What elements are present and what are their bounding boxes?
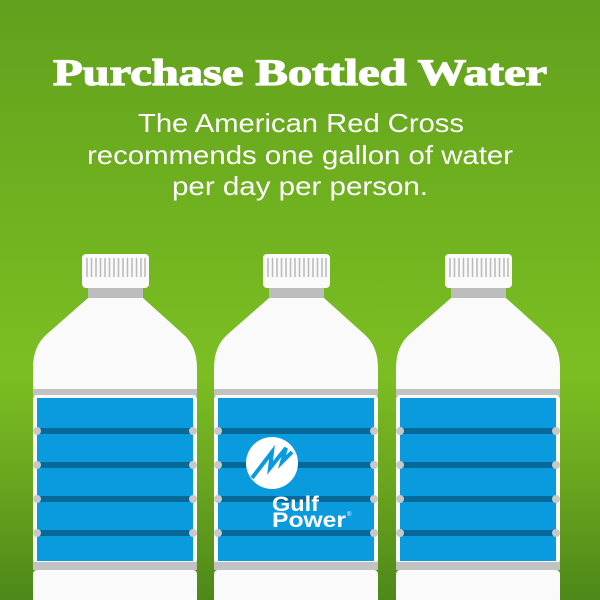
title: Purchase Bottled Water	[53, 53, 547, 94]
subtitle text: The American Red Cross	[138, 108, 464, 138]
bottle: center with logo	[214, 254, 378, 600]
icon: Gulf Power logo: Power	[272, 509, 346, 532]
icon: Gulf Power logo: Gulf	[272, 493, 320, 516]
icon: Gulf Power logo: ®	[347, 511, 352, 518]
subtitle text: recommends one gallon of water	[87, 140, 513, 170]
icon: Gulf Power logo	[246, 437, 352, 532]
subtitle text	[87, 108, 513, 201]
subtitle text: per day per person.	[172, 171, 428, 201]
bottle: right	[396, 254, 560, 600]
bottle: left	[33, 254, 197, 600]
